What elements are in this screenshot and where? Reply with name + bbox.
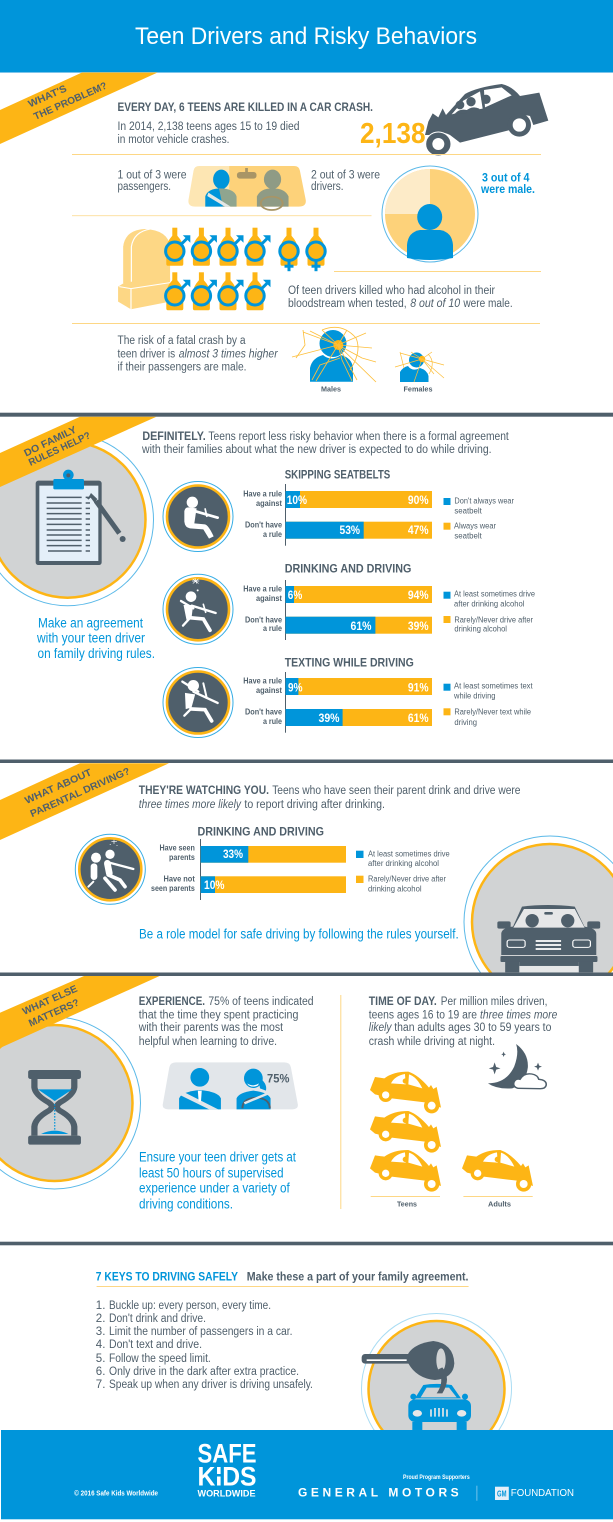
icon: moon stars and cloud bbox=[488, 1044, 546, 1089]
icon: tombstone bbox=[118, 229, 170, 309]
text: experience: helpful when learning to drive. bbox=[139, 1036, 277, 1048]
legend: texting: Rarely/Never text while bbox=[454, 708, 532, 717]
text: make an agreement: with your teen driver bbox=[36, 631, 145, 646]
legend: parental drinking: At least sometimes drive bbox=[368, 850, 450, 859]
callout: 3 out of 4 were male: 3 out of 4 bbox=[482, 173, 530, 185]
chart: texting while driving: TEXTING WHILE DRIVING bbox=[285, 658, 414, 670]
text: ensure supervised experience bbox=[139, 1150, 296, 1211]
text: time of day: TIME OF DAY. bbox=[369, 996, 437, 1008]
ribbon: what's the problem: WHAT'S bbox=[27, 83, 69, 110]
icon: windshield with parent and teen bbox=[163, 1062, 298, 1109]
chart: drinking and driving: 61% bbox=[350, 619, 372, 633]
text: make an agreement bbox=[36, 615, 155, 661]
ribbon: what about parental driving: PARENTAL DRIVING? bbox=[29, 766, 132, 820]
text: ensure supervised experience: driving conditions. bbox=[139, 1196, 233, 1211]
panel: hourglass circle bbox=[0, 1017, 140, 1189]
logo: GM Foundation: FOUNDATION bbox=[511, 1488, 574, 1499]
label: 75%: 75% bbox=[267, 1074, 289, 1086]
icon: hourglass bbox=[28, 1070, 81, 1145]
list: seven keys: Speak up when any driver is driving unsafely. bbox=[109, 1379, 313, 1391]
panel: the problem intro text: In 2014, 2,138 teens ages 15 to 19 died bbox=[118, 121, 300, 133]
list: seven keys: 1. bbox=[96, 1300, 105, 1312]
text: risk with male passengers: almost 3 times higher bbox=[179, 349, 279, 361]
ribbon: what about parental driving: WHAT ABOUT bbox=[23, 767, 94, 807]
icon: car front in circle bbox=[464, 836, 613, 972]
ribbon: what's the problem: THE PROBLEM? bbox=[32, 81, 109, 123]
legend: seatbelts: Always wear bbox=[454, 522, 496, 531]
text: passengers: 1 out of 3 were bbox=[118, 170, 186, 182]
ribbon: what about parental driving bbox=[0, 763, 169, 840]
icon: key and car in circle bbox=[362, 1314, 512, 1464]
text: definitely intro: DEFINITELY. bbox=[142, 431, 206, 443]
panel: the problem intro text bbox=[118, 102, 373, 146]
text: alcohol in bloodstream bbox=[288, 285, 513, 310]
ribbon: do family rules help: RULES HELP? bbox=[27, 430, 92, 469]
panel: the problem intro text: EVERY DAY, 6 TEENS ARE KILLED IN A CAR CRASH. bbox=[118, 102, 373, 114]
logo: GM Foundation: GM bbox=[497, 1490, 507, 1498]
list: seven keys: 2. bbox=[96, 1313, 105, 1325]
label: males: Males bbox=[321, 385, 341, 394]
text: alcohol in bloodstream: Of teen drivers killed who had alcohol in their bbox=[288, 285, 495, 297]
chart: drinking and driving bbox=[243, 564, 536, 640]
header banner bbox=[0, 0, 613, 73]
chart: texting while driving bbox=[243, 658, 533, 733]
chart: texting while driving: Have a rule bbox=[243, 677, 283, 686]
icon: texting driver badge bbox=[163, 668, 233, 738]
footer bbox=[1, 1430, 613, 1519]
chart: texting while driving: 61% bbox=[408, 711, 429, 725]
label: adults: Adults bbox=[488, 1200, 511, 1209]
logo: Safe Kids Worldwide bbox=[198, 1439, 256, 1500]
big number 2,138: 2,138 bbox=[360, 118, 426, 150]
chart: parental drinking and driving: Have not bbox=[164, 875, 195, 884]
text: they're watching you: Teens who have seen their parent drink and drive were bbox=[272, 785, 520, 797]
legend: drinking: Rarely/Never drive after bbox=[454, 616, 533, 625]
list: seven keys: 4. bbox=[96, 1339, 105, 1351]
text: experience bbox=[138, 996, 314, 1048]
legend: drinking: after drinking alcohol bbox=[454, 600, 525, 609]
chart: skipping seatbelts: Don't have bbox=[245, 521, 283, 530]
list: seven keys: 7. bbox=[96, 1379, 105, 1391]
chart: texting while driving: against bbox=[256, 686, 282, 695]
chart: drinking and driving: Don't have bbox=[245, 616, 283, 625]
text: drivers: 2 out of 3 were bbox=[311, 170, 380, 182]
ribbon: do family rules help: DO FAMILY bbox=[22, 424, 79, 459]
text: definitely intro: with their families about what the new driver is expected to do while driving. bbox=[141, 444, 492, 456]
legend: drinking: At least sometimes drive bbox=[454, 590, 536, 599]
list: seven keys: 6. bbox=[96, 1366, 105, 1378]
text: time of day: likely bbox=[369, 1022, 393, 1034]
label: teens: Teens bbox=[397, 1200, 417, 1209]
chart: texting while driving: 39% bbox=[318, 711, 340, 725]
chart: drinking and driving: 6% bbox=[288, 588, 303, 602]
callout: 3 out of 4 were male: were male. bbox=[480, 184, 535, 196]
chart: parental drinking and driving: seen parents bbox=[151, 884, 195, 893]
legend: drinking: drinking alcohol bbox=[454, 625, 507, 634]
ribbon: what's the problem bbox=[0, 72, 158, 144]
ribbon: what else matters: MATTERS? bbox=[27, 997, 81, 1029]
chart: parental drinking and driving: 33% bbox=[223, 847, 243, 861]
text: passengers: passengers. bbox=[118, 181, 171, 193]
chart: skipping seatbelts: 47% bbox=[408, 523, 429, 537]
chart: drinking and driving: against bbox=[256, 594, 282, 603]
chart: skipping seatbelts bbox=[243, 470, 514, 546]
text: time of day: teens ages 16 to 19 are bbox=[369, 1009, 477, 1021]
icon: crashed car bbox=[425, 84, 548, 156]
list: seven keys: 3. bbox=[96, 1326, 105, 1338]
text: ensure supervised experience: Ensure your teen driver gets at bbox=[139, 1150, 296, 1165]
chart: skipping seatbelts: against bbox=[256, 499, 282, 508]
chart: skipping seatbelts: 53% bbox=[340, 523, 360, 537]
text: drivers bbox=[311, 170, 380, 193]
icon: drinking driver badge bbox=[163, 574, 233, 644]
text: alcohol in bloodstream: bloodstream when tested, bbox=[288, 298, 407, 310]
text: time of day: than adults ages 30 to 59 years to bbox=[394, 1022, 551, 1034]
legend: texting: driving bbox=[454, 718, 477, 727]
text: risk with male passengers: The risk of a fatal crash by a bbox=[118, 335, 246, 347]
legend: parental drinking: Rarely/Never drive after bbox=[368, 875, 446, 884]
text: risk with male passengers: if their passengers are male. bbox=[118, 362, 246, 374]
text: experience: with their parents was the most bbox=[138, 1022, 284, 1034]
text: make an agreement: on family driving rules. bbox=[38, 646, 155, 661]
title: Teen Drivers and Risky Behaviors bbox=[135, 23, 477, 50]
ribbon: do family rules help bbox=[0, 417, 156, 487]
text: make an agreement: Make an agreement bbox=[38, 615, 143, 630]
list: seven keys: Don't drink and drive. bbox=[109, 1313, 206, 1325]
legend: seatbelts: seatbelt bbox=[454, 507, 483, 516]
legend: seatbelts: Don't always wear bbox=[454, 497, 514, 506]
chart: drinking and driving: a rule bbox=[263, 624, 283, 633]
chart: drinking and driving: Have a rule bbox=[243, 585, 283, 594]
logo: Safe Kids Worldwide: WORLDWIDE bbox=[198, 1489, 256, 1500]
icon: seatbelt driver badge bbox=[163, 482, 233, 552]
chart: texting while driving: Don't have bbox=[245, 708, 283, 717]
heading: 7 keys to driving safely: 7 KEYS TO DRIVING SAFELY bbox=[96, 1272, 238, 1284]
text: time of day: crash while driving at night. bbox=[369, 1036, 495, 1048]
text: ensure supervised experience: experience under a variety of bbox=[139, 1181, 290, 1196]
icon: male passenger with cracked glass bbox=[292, 327, 376, 382]
text: ensure supervised experience: least 50 hours of supervised bbox=[139, 1165, 284, 1180]
panel: the problem intro text: in motor vehicle crashes. bbox=[118, 134, 230, 146]
icon: alcohol bottles male and female symbols bbox=[166, 228, 325, 310]
text: definitely intro: Teens report less risky behavior when there is a formal agreement bbox=[208, 431, 510, 443]
chart: texting while driving: 9% bbox=[288, 680, 303, 694]
chart: teen crash cars bbox=[370, 1072, 441, 1192]
panel: family rules circle with clipboard bbox=[0, 434, 154, 606]
legend: parental drinking: after drinking alcohol bbox=[368, 859, 439, 868]
text: definitely intro bbox=[141, 431, 510, 456]
icon: clipboard bbox=[36, 470, 126, 565]
text: proud program supporters: Proud Program Supporters bbox=[403, 1474, 470, 1481]
text: passengers bbox=[118, 170, 186, 193]
icon: female passenger with cracked glass bbox=[395, 352, 444, 382]
ribbon: what else matters bbox=[0, 976, 160, 1048]
text: drivers: drivers. bbox=[311, 181, 344, 193]
text: experience: EXPERIENCE. bbox=[139, 996, 205, 1008]
heading: 7 keys to driving safely bbox=[96, 1272, 469, 1287]
logo: Safe Kids Worldwide: SAFE bbox=[198, 1439, 256, 1469]
chart: drinking and driving: DRINKING AND DRIVING bbox=[285, 564, 411, 576]
legend: texting: while driving bbox=[453, 692, 496, 701]
callout: 3 out of 4 were male bbox=[480, 173, 535, 196]
text: alcohol in bloodstream: 8 out of 10 bbox=[410, 298, 461, 310]
text: risk with male passengers bbox=[118, 335, 279, 374]
text: experience: 75% of teens indicated bbox=[208, 996, 314, 1008]
chart: drinking and driving: 39% bbox=[408, 619, 429, 633]
legend: texting bbox=[444, 682, 533, 727]
text: copyright: © 2016 Safe Kids Worldwide bbox=[74, 1490, 158, 1498]
text: be a role model: Be a role model for safe driving by following the rules yourself. bbox=[139, 926, 459, 941]
logo: General Motors: GENERAL MOTORS bbox=[298, 1486, 459, 1500]
text: time of day: three times more bbox=[480, 1009, 557, 1021]
icon: windshield with passenger and driver bbox=[188, 166, 306, 210]
text: they're watching you: THEY'RE WATCHING YOU. bbox=[139, 785, 269, 797]
legend: parental drinking bbox=[356, 850, 450, 894]
legend: drinking bbox=[444, 590, 536, 634]
chart: skipping seatbelts: 90% bbox=[408, 493, 429, 507]
chart: skipping seatbelts: SKIPPING SEATBELTS bbox=[285, 470, 391, 482]
list: seven keys: Don't text and drive. bbox=[109, 1339, 202, 1351]
chart: parental drinking and driving bbox=[151, 827, 450, 900]
list: seven keys: Follow the speed limit. bbox=[109, 1353, 211, 1365]
chart: texting while driving: 91% bbox=[408, 680, 429, 694]
list: seven keys bbox=[96, 1300, 313, 1391]
icon: parent and teen drinking badge bbox=[75, 834, 145, 904]
list: seven keys: Only drive in the dark after extra practice. bbox=[109, 1366, 299, 1378]
chart: texting while driving: a rule bbox=[263, 717, 283, 726]
legend: parental drinking: drinking alcohol bbox=[368, 885, 422, 894]
chart: adult crash car bbox=[462, 1150, 533, 1192]
list: seven keys: Limit the number of passengers in a car. bbox=[109, 1326, 292, 1338]
chart: skipping seatbelts: Have a rule bbox=[243, 490, 283, 499]
chart: skipping seatbelts: a rule bbox=[263, 530, 283, 539]
text: they're watching you: to report driving after drinking. bbox=[244, 799, 385, 811]
chart: parental drinking and driving: parents bbox=[169, 853, 195, 862]
logo: Safe Kids Worldwide: KIDS bbox=[198, 1462, 256, 1492]
label: females: Females bbox=[404, 385, 432, 394]
text: time of day: Per million miles driven, bbox=[441, 996, 548, 1008]
text: they're watching you bbox=[139, 785, 521, 811]
list: seven keys: Buckle up: every person, every time. bbox=[109, 1300, 271, 1312]
legend: texting: At least sometimes text bbox=[454, 682, 533, 691]
legend: seatbelts bbox=[444, 497, 514, 541]
text: alcohol in bloodstream: were male. bbox=[463, 298, 513, 310]
list: seven keys: 5. bbox=[96, 1353, 105, 1365]
text: risk with male passengers: teen driver is bbox=[118, 349, 175, 361]
heading: 7 keys to driving safely: Make these a part of your family agreement. bbox=[247, 1272, 468, 1284]
text: experience: that the time they spent practicing bbox=[139, 1009, 298, 1021]
chart: drinking and driving: 94% bbox=[408, 588, 429, 602]
chart: parental drinking and driving: DRINKING AND DRIVING bbox=[198, 827, 324, 839]
text: time of day bbox=[369, 996, 557, 1048]
chart: parental drinking and driving: 10% bbox=[204, 878, 225, 892]
chart: parental drinking and driving: Have seen bbox=[160, 844, 195, 853]
legend: seatbelts: seatbelt bbox=[454, 532, 483, 541]
logo: GM Foundation bbox=[495, 1487, 574, 1500]
ribbon: what else matters: WHAT ELSE bbox=[21, 984, 80, 1018]
text: they're watching you: three times more likely bbox=[139, 799, 242, 811]
chart: skipping seatbelts: 10% bbox=[287, 493, 307, 507]
icon: 3 of 4 pie with person bbox=[382, 166, 478, 262]
